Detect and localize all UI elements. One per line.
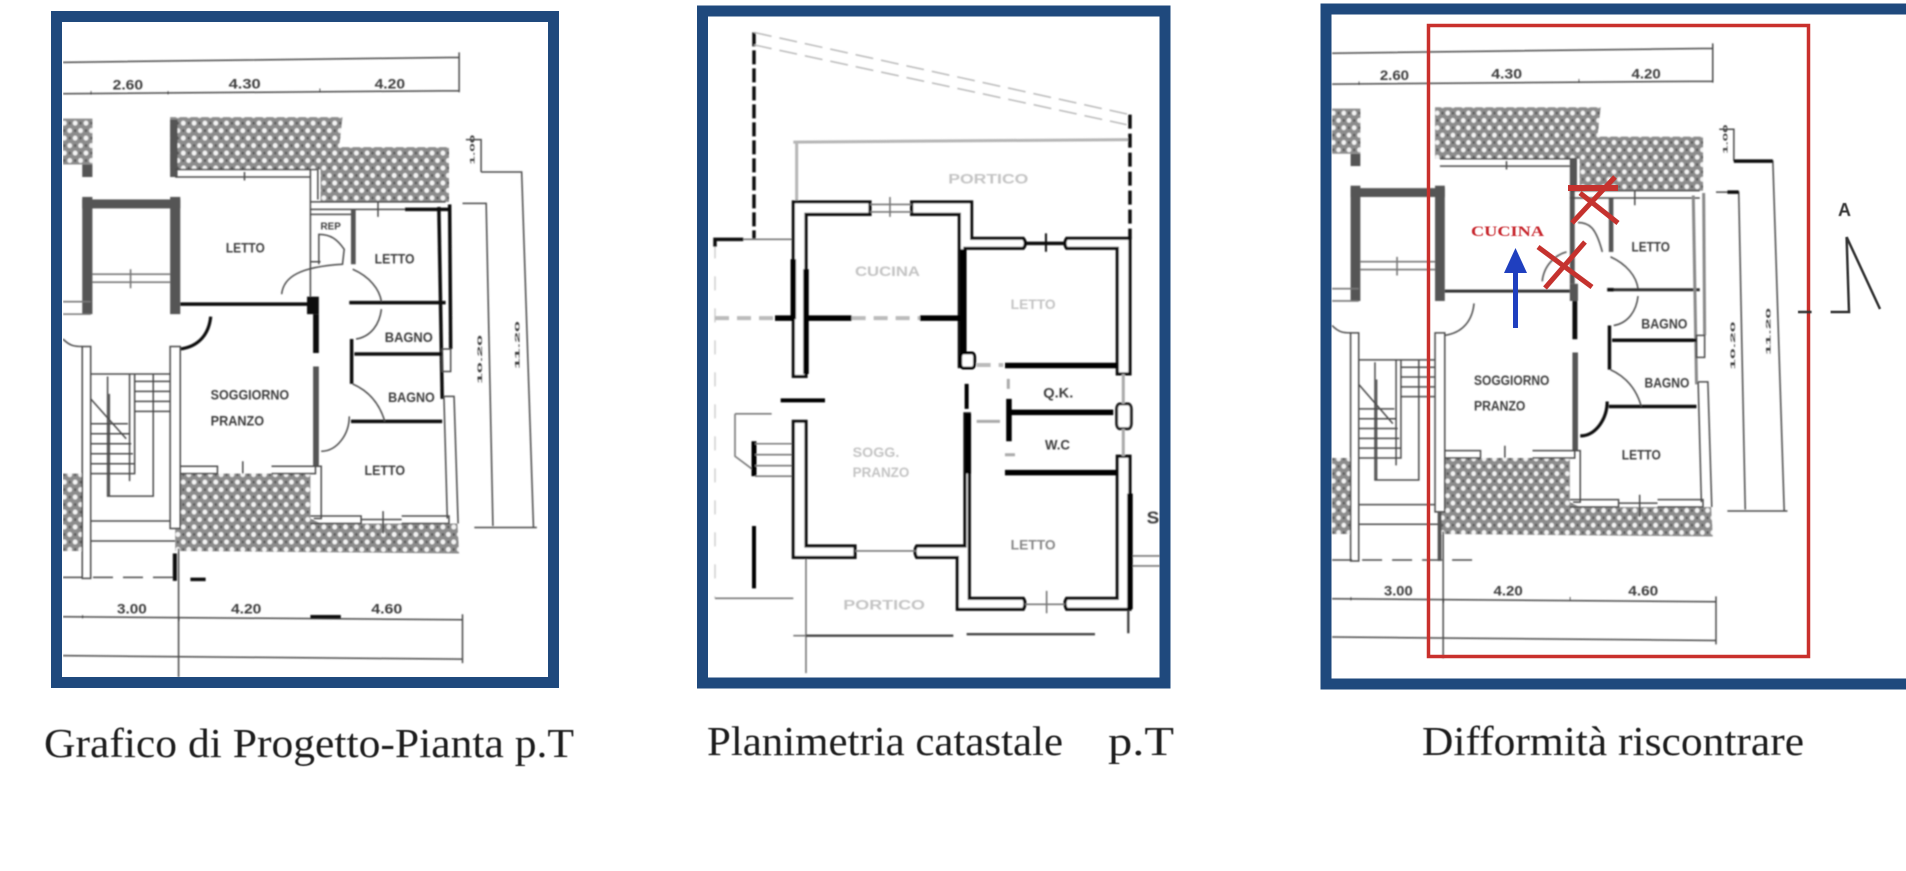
icon: red cross upper — [1568, 177, 1618, 223]
caption: nonconformities: Difformità riscontrare — [1422, 718, 1804, 764]
panel: nonconformities found — [1326, 9, 1906, 764]
floor plan drawing: project: 2.60 — [113, 77, 144, 93]
floor plan drawing: as-built: 4.20 — [1494, 584, 1523, 599]
floor plan drawing: cadastral: PORTICO — [948, 171, 1028, 187]
floor plan drawing: project: REP — [321, 220, 341, 232]
floor plan drawing: project: 4.20 — [231, 600, 262, 617]
floor plan drawing: cadastral: LETTO — [1011, 537, 1056, 553]
floor plan drawing: project: 4.30 — [229, 75, 261, 92]
floor plan drawing: cadastral: LETTO — [1011, 296, 1056, 313]
floor plan drawing: cadastral: PORTICO — [843, 596, 925, 613]
floor plan drawing: as-built: LETTO — [1622, 448, 1661, 463]
floor plan drawing: project: 10.20 — [477, 335, 484, 384]
caption: project plan: Grafico di Progetto-Pianta p.T — [44, 720, 574, 766]
floor plan drawing: project: LETTO — [226, 239, 265, 256]
floor plan drawing: project: 3.00 — [117, 600, 147, 617]
floor plan drawing: as-built: 4.60 — [1628, 584, 1658, 599]
icon: red cross lower — [1538, 242, 1592, 288]
floor plan drawing: project: BAGNO — [388, 389, 435, 405]
floor plan drawing: as-built: 10.20 — [1730, 322, 1737, 370]
floor plan drawing: project: 11.20 — [514, 321, 521, 369]
floor plan drawing: cadastral: PRANZO — [853, 464, 909, 481]
floor plan drawing: as-built: BAGNO — [1641, 317, 1687, 332]
floor plan drawing: as-built: 2.60 — [1380, 68, 1409, 84]
floor plan drawing: cadastral: CUCINA — [855, 263, 921, 280]
floor plan drawing: project: BAGNO — [385, 329, 433, 346]
floor plan drawing: project: 4.20 — [375, 75, 406, 92]
floor plan drawing: as-built — [1332, 43, 1787, 658]
floor plan drawing: project: LETTO — [364, 462, 405, 479]
panel border — [702, 11, 1165, 683]
floor plan drawing: as-built: LETTO — [1632, 240, 1670, 255]
floor plan drawing: as-built: 4.30 — [1491, 67, 1522, 82]
panel: cadastral floor plan — [702, 11, 1174, 764]
floor plan drawing: project: 4.60 — [371, 600, 403, 617]
floor plan drawing: as-built: 1.00 — [1722, 124, 1729, 154]
floor plan drawing: as-built: SOGGIORNO — [1474, 373, 1549, 388]
floor plan drawing: cadastral: W.C — [1045, 437, 1070, 453]
panel: project floor plan — [44, 16, 574, 766]
section mark A: A — [1838, 200, 1851, 220]
caption: cadastral plan: p.T — [1108, 718, 1174, 764]
floor plan drawing: as-built: 4.20 — [1632, 67, 1661, 82]
floor plan drawing: cadastral: S — [1147, 508, 1159, 528]
floor plan drawing: cadastral — [715, 32, 1161, 673]
floor plan drawing: as-built: BAGNO — [1645, 376, 1689, 391]
floor plan drawing: project: PRANZO — [211, 412, 264, 429]
panel border — [1326, 9, 1906, 684]
caption: cadastral plan: Planimetria catastale — [707, 718, 1063, 764]
arrow: blue up — [1504, 248, 1527, 328]
panel border — [56, 16, 554, 682]
label: kitchen: CUCINA — [1471, 224, 1544, 240]
floor plan drawing: project: 1.00 — [468, 134, 476, 165]
floor plan drawing: project — [63, 52, 537, 677]
floor plan drawing: as-built: 11.20 — [1765, 308, 1772, 355]
section mark A — [1798, 200, 1880, 312]
floor plan drawing: cadastral: Q.K. — [1043, 384, 1073, 401]
floor plan drawing: cadastral: SOGG. — [853, 444, 899, 461]
floor plan drawing: project: SOGGIORNO — [211, 387, 289, 403]
floor plan drawing: as-built: PRANZO — [1474, 399, 1525, 414]
floor plan drawing: as-built: 3.00 — [1384, 584, 1413, 599]
red outline of the apartment — [1428, 26, 1808, 656]
floor plan drawing: project: LETTO — [375, 251, 415, 267]
